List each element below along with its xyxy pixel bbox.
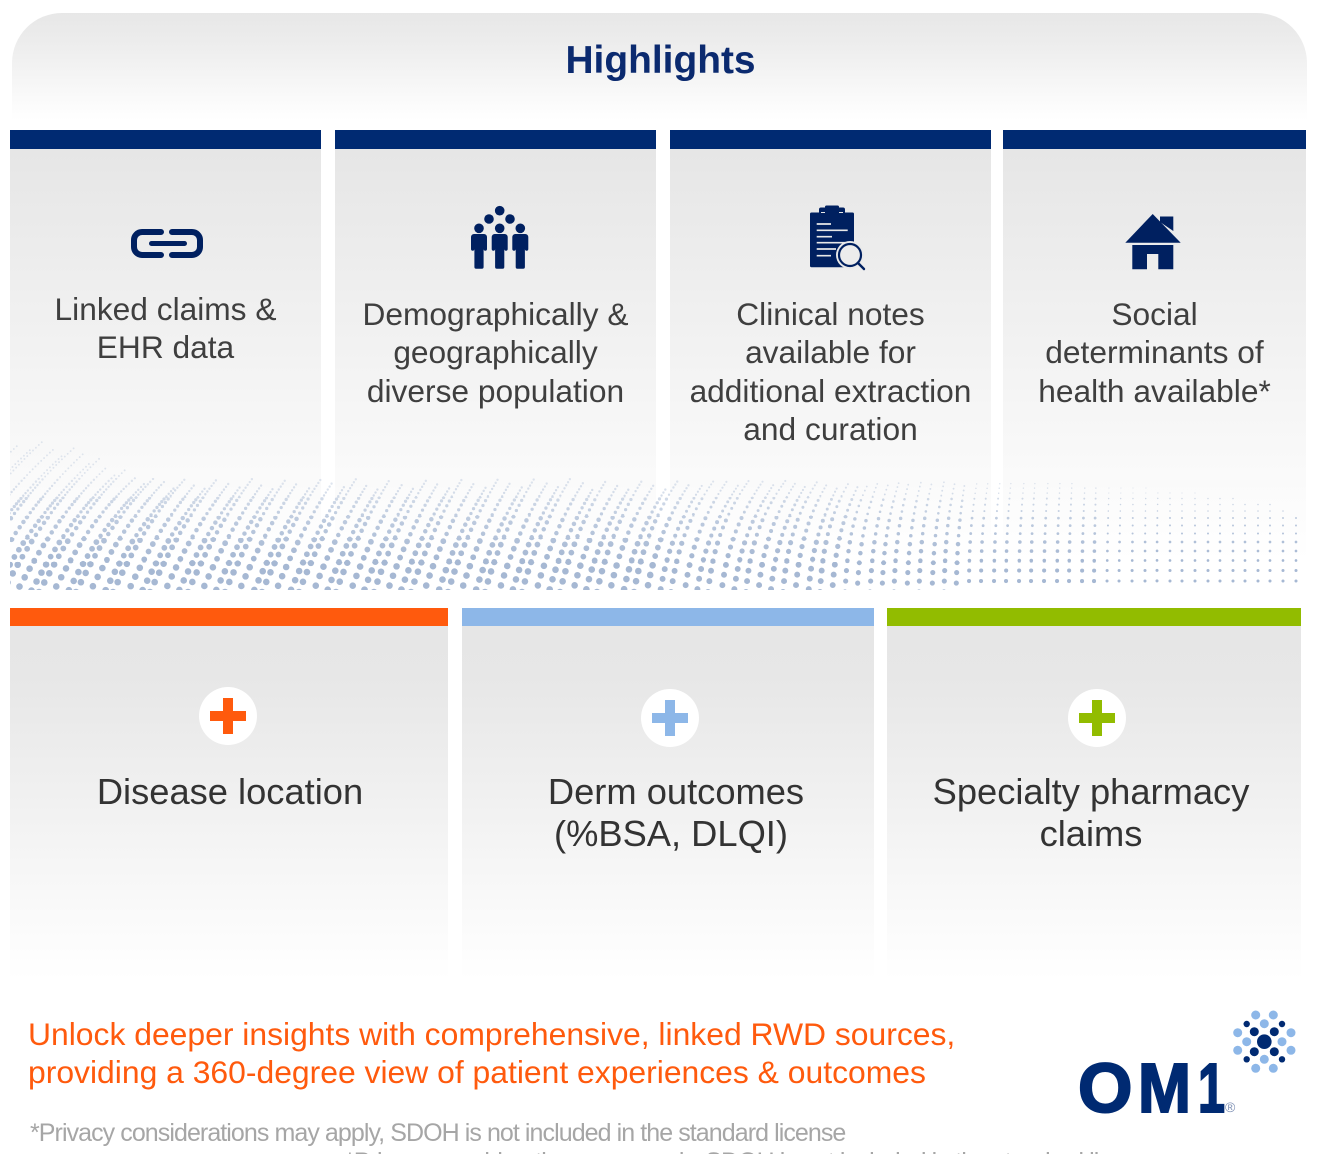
label: Social bbox=[1111, 296, 1198, 332]
label bbox=[55, 291, 276, 365]
halftone dot wave bbox=[10, 441, 1298, 590]
logo dot burst bbox=[1233, 1010, 1296, 1073]
label: diverse population bbox=[367, 373, 624, 409]
icon: green plus bbox=[1068, 689, 1126, 747]
label bbox=[690, 296, 971, 447]
label: Specialty pharmacy bbox=[933, 771, 1249, 812]
icon: clipboard with magnifier bbox=[810, 206, 866, 270]
callout: key message: providing a 360-degree view of patient experiences & outcomes bbox=[28, 1054, 926, 1090]
panel bar bbox=[10, 608, 448, 626]
callout: key message bbox=[28, 1016, 955, 1090]
label: Demographically & bbox=[363, 296, 628, 332]
label: determinants of bbox=[1045, 334, 1264, 370]
panel: social determinants bbox=[1003, 130, 1306, 560]
label: EHR data bbox=[97, 329, 234, 365]
panel bar bbox=[462, 608, 874, 626]
icon: house bbox=[1125, 214, 1181, 270]
panel bar bbox=[887, 608, 1301, 626]
label: available for bbox=[745, 334, 916, 370]
panel: derm outcomes bbox=[462, 608, 874, 980]
callout: key message: Unlock deeper insights with comprehensive, linked RWD sources, bbox=[28, 1016, 955, 1052]
footnote: *Privacy considerations may apply, SDOH is not included in the standard license bbox=[30, 1119, 845, 1147]
panel bar bbox=[1003, 130, 1306, 149]
logo wordmark bbox=[1078, 1049, 1225, 1127]
panel: diverse population bbox=[335, 130, 656, 560]
label: geographically bbox=[393, 334, 598, 370]
label: and curation bbox=[743, 411, 918, 447]
title: Highlights bbox=[565, 39, 756, 82]
icon: orange plus bbox=[199, 687, 257, 745]
label: (%BSA, DLQI) bbox=[554, 813, 788, 854]
logo: OM1 bbox=[1078, 1010, 1296, 1127]
panel: linked claims bbox=[10, 130, 321, 560]
label bbox=[548, 771, 804, 854]
header band bbox=[12, 13, 1307, 120]
label: Linked claims & bbox=[55, 291, 276, 327]
label: claims bbox=[1040, 813, 1142, 854]
label: Disease location bbox=[97, 771, 363, 812]
icon: people group bbox=[471, 206, 528, 269]
panel: clinical notes bbox=[670, 130, 991, 560]
logo wordmark: O bbox=[1078, 1049, 1132, 1127]
panel: disease location bbox=[10, 608, 448, 980]
label: additional extraction bbox=[690, 373, 971, 409]
panel: specialty pharmacy bbox=[887, 608, 1301, 980]
label bbox=[933, 771, 1250, 854]
panel bar bbox=[10, 130, 321, 149]
label bbox=[1038, 296, 1271, 409]
label: Clinical notes bbox=[736, 296, 925, 332]
registered mark: ® bbox=[1225, 1099, 1236, 1115]
panel bar bbox=[670, 130, 991, 149]
logo wordmark: M bbox=[1138, 1049, 1191, 1127]
panel bar bbox=[335, 130, 656, 149]
label: Derm outcomes bbox=[548, 771, 804, 812]
icon: blue plus bbox=[641, 689, 699, 747]
label bbox=[363, 296, 628, 409]
icon: chain link bbox=[131, 229, 203, 258]
logo wordmark: 1 bbox=[1198, 1049, 1225, 1127]
label: health available* bbox=[1038, 373, 1271, 409]
